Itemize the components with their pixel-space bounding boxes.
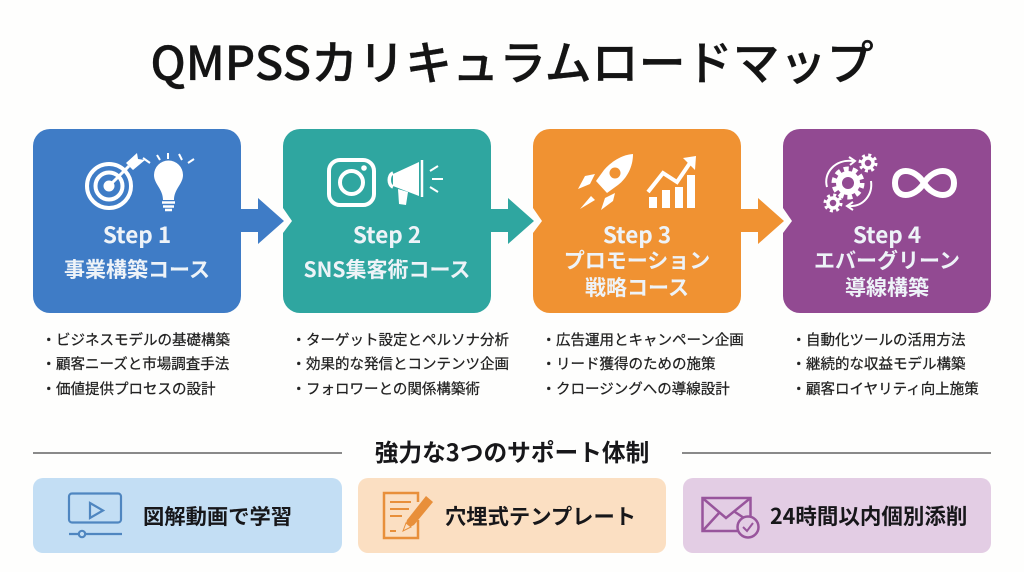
panel: fill-in template [358, 478, 666, 553]
arrow: step 2 to step 3 [491, 198, 542, 244]
text block: step 4 bullets: ・継続的な収益モデル構築 [792, 353, 966, 374]
heading: step 2: Step 2 [353, 218, 421, 250]
icon: gears and infinity [824, 154, 957, 212]
heading: course name 3 [564, 245, 710, 302]
heading: step 3: Step 3 [603, 218, 671, 250]
heading: course name 1: 事業構築コース [64, 254, 210, 284]
panel: individual feedback [683, 478, 991, 553]
text block: step 1 bullets [42, 328, 230, 398]
heading: support section: 強力な3つのサポート体制 [375, 434, 649, 468]
icon: rocket and growth chart [578, 154, 696, 210]
text block: step 2 bullets: ・フォロワーとの関係構築術 [292, 378, 480, 398]
arrow: step 3 to step 4 [741, 198, 792, 244]
heading: step 1: Step 1 [103, 218, 171, 250]
heading: course name 3: 戦略コース [585, 272, 689, 302]
heading: course name 4: 導線構築 [845, 272, 929, 302]
text block: step 4 bullets: ・自動化ツールの活用方法 [792, 328, 966, 350]
text block: step 1 bullets: ・価値提供プロセスの設計 [42, 378, 216, 398]
text block: step 1 bullets: ・顧客ニーズと市場調査手法 [42, 353, 229, 374]
heading: course name 4 [814, 245, 960, 302]
title: QMPSSカリキュラムロードマップ [150, 25, 874, 94]
text block: step 4 bullets: ・顧客ロイヤリティ向上施策 [792, 378, 979, 398]
text block: step 4 bullets [792, 328, 979, 398]
arrow: step 1 to step 2 [241, 198, 292, 244]
label: individual feedback: 24時間以内個別添削 [770, 500, 967, 531]
icon: document and pencil [382, 492, 433, 540]
text block: step 1 bullets: ・ビジネスモデルの基礎構築 [42, 328, 230, 350]
panel: video learning [33, 478, 342, 553]
text block: step 3 bullets: ・リード獲得のための施策 [542, 353, 716, 374]
icon: video player [68, 492, 122, 538]
icon: envelope with check [701, 496, 760, 539]
panel: step 2 [283, 129, 491, 313]
text block: step 3 bullets: ・広告運用とキャンペーン企画 [542, 328, 744, 350]
heading: course name 4: エバーグリーン [814, 245, 960, 275]
text block: step 3 bullets [542, 328, 744, 398]
text block: step 2 bullets: ・ターゲット設定とペルソナ分析 [292, 328, 509, 350]
panel: step 1 [33, 129, 241, 313]
text block: step 3 bullets: ・クロージングへの導線設計 [542, 378, 730, 398]
panel: step 3 [533, 129, 741, 313]
label: video learning: 図解動画で学習 [143, 500, 292, 531]
text block: step 2 bullets: ・効果的な発信とコンテンツ企画 [292, 353, 509, 374]
heading: course name 2: SNS集客術コース [304, 254, 470, 284]
icon: target and light bulb [85, 153, 194, 212]
panel: step 4 [783, 129, 991, 313]
label: fill-in template: 穴埋式テンプレート [445, 500, 636, 531]
icon: instagram and megaphone [327, 158, 443, 207]
heading: course name 3: プロモーション [564, 245, 710, 275]
heading: step 4: Step 4 [853, 218, 921, 250]
text block: step 2 bullets [292, 328, 509, 398]
